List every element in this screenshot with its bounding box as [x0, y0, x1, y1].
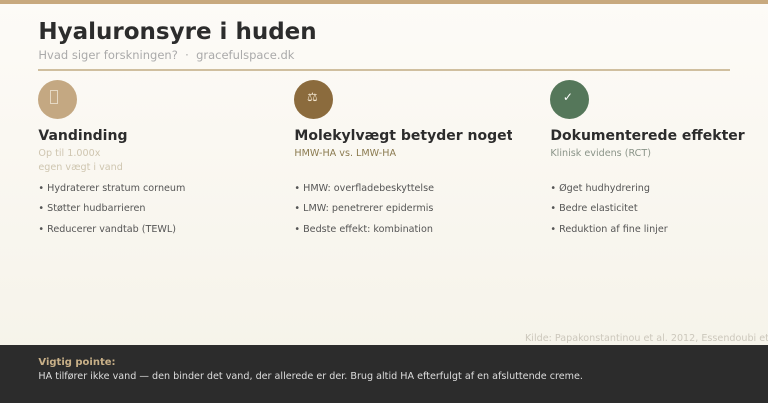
bullet list: Vandinding: • Hydraterer stratum corneum — [38, 182, 185, 194]
bullet list: Vandinding — [38, 182, 185, 234]
subheading line two: egen vægt i vand — [38, 162, 123, 173]
subheading: Vandinding: Op til 1.000x — [38, 148, 100, 158]
subheading: Molekylvægt: HMW-HA vs. LMW-HA — [294, 148, 396, 158]
subheading: Dokumenterede effekter: Klinisk evidens (RCT) — [550, 148, 651, 158]
icon: water drop placeholder — [38, 80, 77, 119]
bullet list: Molekylvægt: • LMW: penetrerer epidermis — [294, 203, 433, 214]
subtitle: Hvad siger forskningen? · gracefulspace.dk — [38, 48, 294, 62]
icon: check mark — [550, 80, 589, 119]
bullet list: Dokumenterede effekter — [550, 182, 668, 234]
callout label: Vigtig pointe: — [38, 357, 116, 368]
top accent bar — [0, 0, 768, 4]
callout text: HA tilfører ikke vand — den binder det vand, der allerede er der. Brug altid HA efterfulgt af en afsluttende creme. — [38, 371, 583, 382]
bullet list: Dokumenterede effekter: • Bedre elasticitet — [550, 203, 638, 214]
icon: check mark: ✓ — [563, 90, 573, 104]
icon: scales: ⚖ — [307, 90, 318, 104]
bullet list: Molekylvægt: • Bedste effekt: kombination — [294, 224, 433, 234]
bullet list: Dokumenterede effekter: • Reduktion af fine linjer — [550, 224, 668, 234]
panel: Vandinding — [38, 80, 185, 234]
heading: Molekylvægt: Molekylvægt betyder noget — [294, 128, 512, 144]
bullet list: Vandinding: • Støtter hudbarrieren — [38, 203, 145, 214]
header divider — [38, 69, 730, 70]
bullet list: Molekylvægt: • HMW: overfladebeskyttelse — [294, 182, 434, 194]
callout: key point — [0, 345, 768, 403]
panel: Molekylvægt — [294, 80, 512, 234]
bullet list: Molekylvægt — [294, 182, 434, 234]
heading: Vandinding: Vandinding — [38, 128, 127, 144]
bullet list: Dokumenterede effekter: • Øget hudhydrering — [550, 182, 650, 194]
heading: Dokumenterede effekter: Dokumenterede effekter — [550, 128, 745, 144]
icon: scales — [294, 80, 333, 119]
bullet list: Vandinding: • Reducerer vandtab (TEWL) — [38, 224, 176, 234]
title: Hyaluronsyre i huden — [38, 19, 317, 45]
panel: Dokumenterede effekter — [550, 80, 745, 234]
